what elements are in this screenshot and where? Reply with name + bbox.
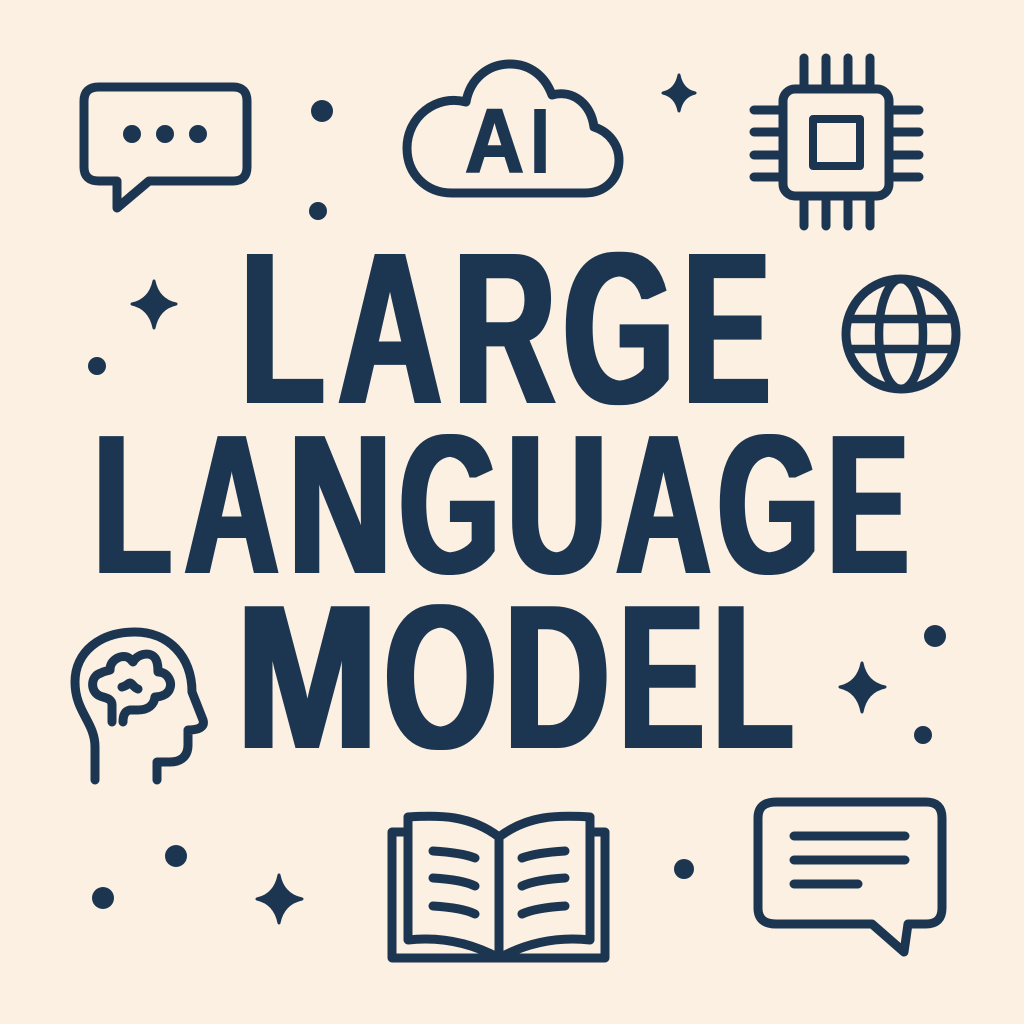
title line: MODEL: O bbox=[384, 562, 497, 792]
icon: microchip bbox=[754, 58, 919, 226]
title line: LARGE: G bbox=[563, 207, 675, 449]
title line: MODEL: E bbox=[620, 562, 704, 792]
title line: MODEL: M bbox=[236, 562, 378, 792]
title line: LARGE: A bbox=[338, 207, 442, 449]
title line: LARGE: E bbox=[683, 207, 770, 449]
title line: LANGUAGE: N bbox=[288, 394, 392, 616]
decorative sparkles bbox=[132, 75, 885, 923]
icon: chat bubble with lines bbox=[758, 802, 942, 952]
title line: LANGUAGE: A bbox=[184, 394, 279, 616]
icon: chat bubble with dots bbox=[84, 87, 247, 208]
icon: AI cloud bbox=[407, 64, 619, 193]
icon: AI cloud: A bbox=[465, 92, 524, 192]
icon: globe bbox=[846, 279, 956, 389]
decorative dots bbox=[88, 100, 946, 909]
title line: LANGUAGE: L bbox=[94, 394, 172, 616]
icon: AI cloud: I bbox=[530, 92, 550, 192]
title line: MODEL: L bbox=[713, 562, 793, 792]
title line: LARGE: L bbox=[241, 207, 324, 449]
icon: open book bbox=[392, 816, 605, 958]
title line: LANGUAGE: G bbox=[399, 394, 500, 616]
title line: LANGUAGE: A bbox=[616, 394, 711, 616]
title line: LANGUAGE: E bbox=[828, 394, 908, 616]
title line: LARGE: R bbox=[454, 207, 556, 449]
title bbox=[94, 207, 908, 792]
title line: MODEL: D bbox=[504, 562, 610, 792]
title line: LANGUAGE: G bbox=[717, 394, 820, 616]
title line: LANGUAGE: U bbox=[507, 394, 607, 616]
icon: head with brain bbox=[75, 632, 203, 780]
